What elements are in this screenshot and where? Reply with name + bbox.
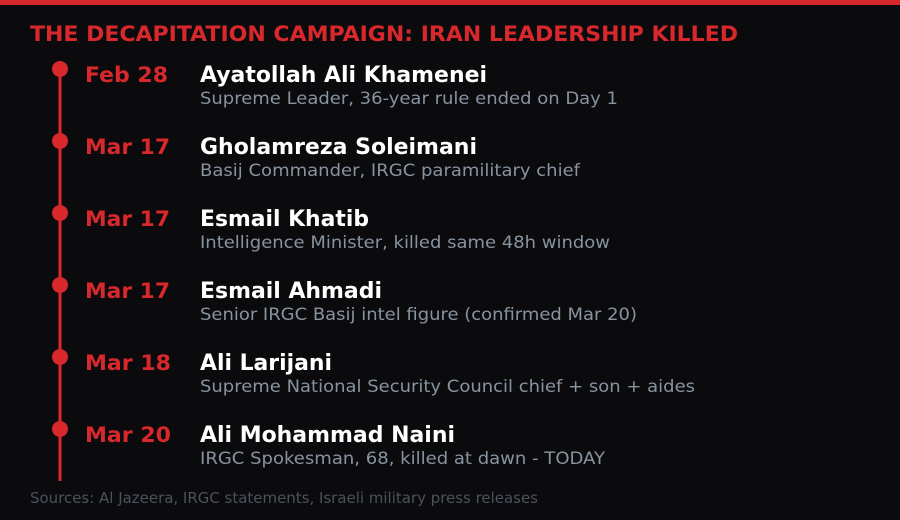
entry 3: Esmail Khatib bbox=[200, 207, 369, 232]
entry 6: Mar 20 bbox=[85, 423, 171, 447]
sources: Sources: Al Jazeera, IRGC statements, Israeli military press releases bbox=[30, 489, 538, 507]
entry 2 bbox=[52, 133, 581, 181]
entry 2: Gholamreza Soleimani bbox=[200, 135, 477, 160]
entry 4: Esmail Ahmadi bbox=[200, 279, 382, 304]
entry 5: Ali Larijani bbox=[200, 351, 332, 376]
entry 4: Mar 17 bbox=[85, 279, 170, 303]
entry 6 bbox=[52, 421, 606, 469]
entry 2: Mar 17 bbox=[85, 135, 170, 159]
entry 3 bbox=[52, 205, 610, 253]
entry 3: Mar 17 bbox=[85, 207, 170, 231]
entry 5: Mar 18 bbox=[85, 351, 171, 375]
entry 2: Basij Commander, IRGC paramilitary chief bbox=[200, 161, 581, 181]
entry 5: Supreme National Security Council chief + son + aides bbox=[200, 377, 695, 397]
entry 6: Ali Mohammad Naini bbox=[200, 423, 455, 448]
entry 3: Intelligence Minister, killed same 48h window bbox=[200, 233, 610, 253]
timeline line bbox=[58, 64, 62, 481]
entry 4 bbox=[52, 277, 637, 325]
entry 1: Ayatollah Ali Khamenei bbox=[200, 63, 487, 88]
entry 6: IRGC Spokesman, 68, killed at dawn - TODAY bbox=[200, 449, 606, 469]
top accent bar bbox=[0, 0, 900, 5]
entry 5 bbox=[52, 349, 695, 397]
entry 4: Senior IRGC Basij intel figure (confirmed Mar 20) bbox=[200, 305, 637, 325]
entry 1 bbox=[52, 61, 618, 109]
entry 1: Supreme Leader, 36-year rule ended on Day 1 bbox=[200, 89, 618, 109]
title: THE DECAPITATION CAMPAIGN: IRAN LEADERSHIP KILLED bbox=[30, 22, 738, 46]
entry 1: Feb 28 bbox=[85, 63, 168, 87]
